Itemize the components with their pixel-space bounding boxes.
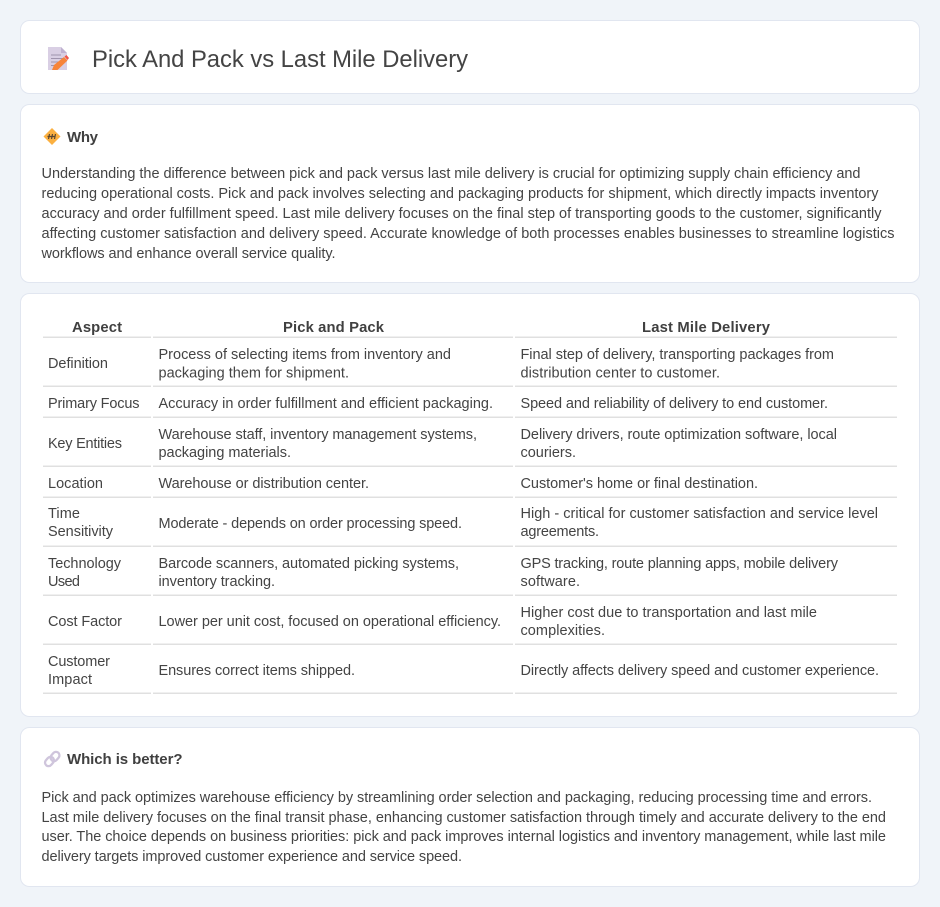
row: technology used: Technology [48, 556, 122, 572]
text block: why explanation: Understanding the difference between pick and pack versus last mile delivery is crucial for optimizing supply chain efficiency and [42, 166, 860, 182]
row: key entities: packaging materials. [158, 445, 291, 461]
text block: verdict: delivery targets improved customer experience and service speed. [42, 849, 462, 865]
panel: comparison table [20, 294, 920, 716]
panel: page header [20, 20, 920, 94]
icon: chain link [44, 750, 61, 768]
icon: orange diamond sign [44, 128, 60, 145]
table header row: Pick and Pack [283, 320, 385, 336]
text block: why explanation [40, 166, 894, 262]
row: time sensitivity [43, 506, 897, 547]
row: cost factor: Lower per unit cost, focused on operational efficiency. [158, 614, 501, 630]
row: cost factor: complexities. [520, 623, 605, 639]
row: customer impact: Ensures correct items shipped. [158, 663, 355, 679]
text block: why explanation: affecting customer satisfaction and delivery speed. Accurate knowledge of both processes enables businesses to streamline logistics [42, 226, 894, 242]
panel: which is better [20, 728, 920, 886]
row: definition: Final step of delivery, transporting packages from [520, 347, 834, 363]
text block: verdict [42, 790, 886, 865]
row: time sensitivity: Time [48, 506, 80, 522]
row: location: Warehouse or distribution center. [158, 476, 369, 492]
row: time sensitivity: agreements. [520, 524, 599, 540]
row: time sensitivity: Sensitivity [48, 524, 114, 540]
row: technology used: software. [520, 574, 580, 590]
text block: verdict: Last mile delivery focuses on the final transit phase, enhancing customer satisfaction through timely and accurate delivery to the end [42, 810, 886, 826]
row: definition: Process of selecting items from inventory and [158, 347, 451, 363]
table header row [43, 320, 897, 338]
text block: verdict: user. The choice depends on business priorities: pick and pack improves internal logistics and inventory management, while last mile [42, 829, 886, 845]
text block: verdict: Pick and pack optimizes warehouse efficiency by streamlining order selection and packaging, reducing processing time and errors. [42, 790, 872, 806]
row: location: Customer's home or final destination. [520, 476, 758, 492]
text block: why explanation: workflows and enhance overall service quality. [40, 246, 336, 262]
row: technology used: inventory tracking. [158, 574, 275, 590]
icon: memo with pencil [48, 47, 69, 70]
row: time sensitivity: High - critical for customer satisfaction and service level [520, 506, 878, 522]
row: key entities: Delivery drivers, route optimization software, local [520, 427, 837, 443]
row: technology used: GPS tracking, route planning apps, mobile delivery [520, 556, 839, 572]
row: primary focus: Accuracy in order fulfillment and efficient packaging. [158, 396, 493, 412]
row: definition: Definition [48, 356, 108, 372]
row: cost factor: Higher cost due to transportation and last mile [520, 605, 817, 621]
row: cost factor [43, 605, 897, 645]
title: Pick And Pack vs Last Mile Delivery [92, 46, 468, 73]
row: technology used: Used [48, 574, 80, 590]
panel: why [20, 104, 920, 282]
row: key entities: Warehouse staff, inventory management systems, [158, 427, 477, 443]
row: customer impact [43, 654, 897, 694]
row: customer impact: Customer [48, 654, 110, 670]
row: key entities [43, 427, 897, 467]
row: definition: packaging them for shipment. [158, 366, 349, 382]
row: definition [43, 347, 897, 387]
row: primary focus: Primary Focus [48, 396, 140, 412]
row: location: Location [48, 476, 103, 492]
row: location [43, 476, 897, 498]
row: key entities: couriers. [520, 445, 576, 461]
text block: why explanation: accuracy and order fulfillment speed. Last mile delivery focuses on the final step of transporting goods to the customer, significantly [42, 206, 882, 222]
row: customer impact: Impact [48, 672, 92, 688]
row: definition: distribution center to customer. [520, 366, 720, 382]
row: technology used [43, 556, 897, 596]
row: time sensitivity: Moderate - depends on order processing speed. [158, 516, 462, 532]
row: primary focus [43, 396, 897, 418]
table header row: Last Mile Delivery [642, 320, 771, 336]
row: technology used: Barcode scanners, automated picking systems, [158, 556, 459, 572]
text block: why explanation: reducing operational costs. Pick and pack involves selecting and packaging products for shipment, which directly impacts inventory [42, 186, 879, 202]
row: primary focus: Speed and reliability of delivery to end customer. [520, 396, 828, 412]
row: key entities: Key Entities [48, 436, 122, 452]
row: customer impact: Directly affects delivery speed and customer experience. [520, 663, 879, 679]
heading: which is better: Which is better? [67, 751, 182, 768]
heading: why: Why [67, 129, 99, 146]
row: cost factor: Cost Factor [48, 614, 122, 630]
table header row: Aspect [72, 320, 122, 336]
